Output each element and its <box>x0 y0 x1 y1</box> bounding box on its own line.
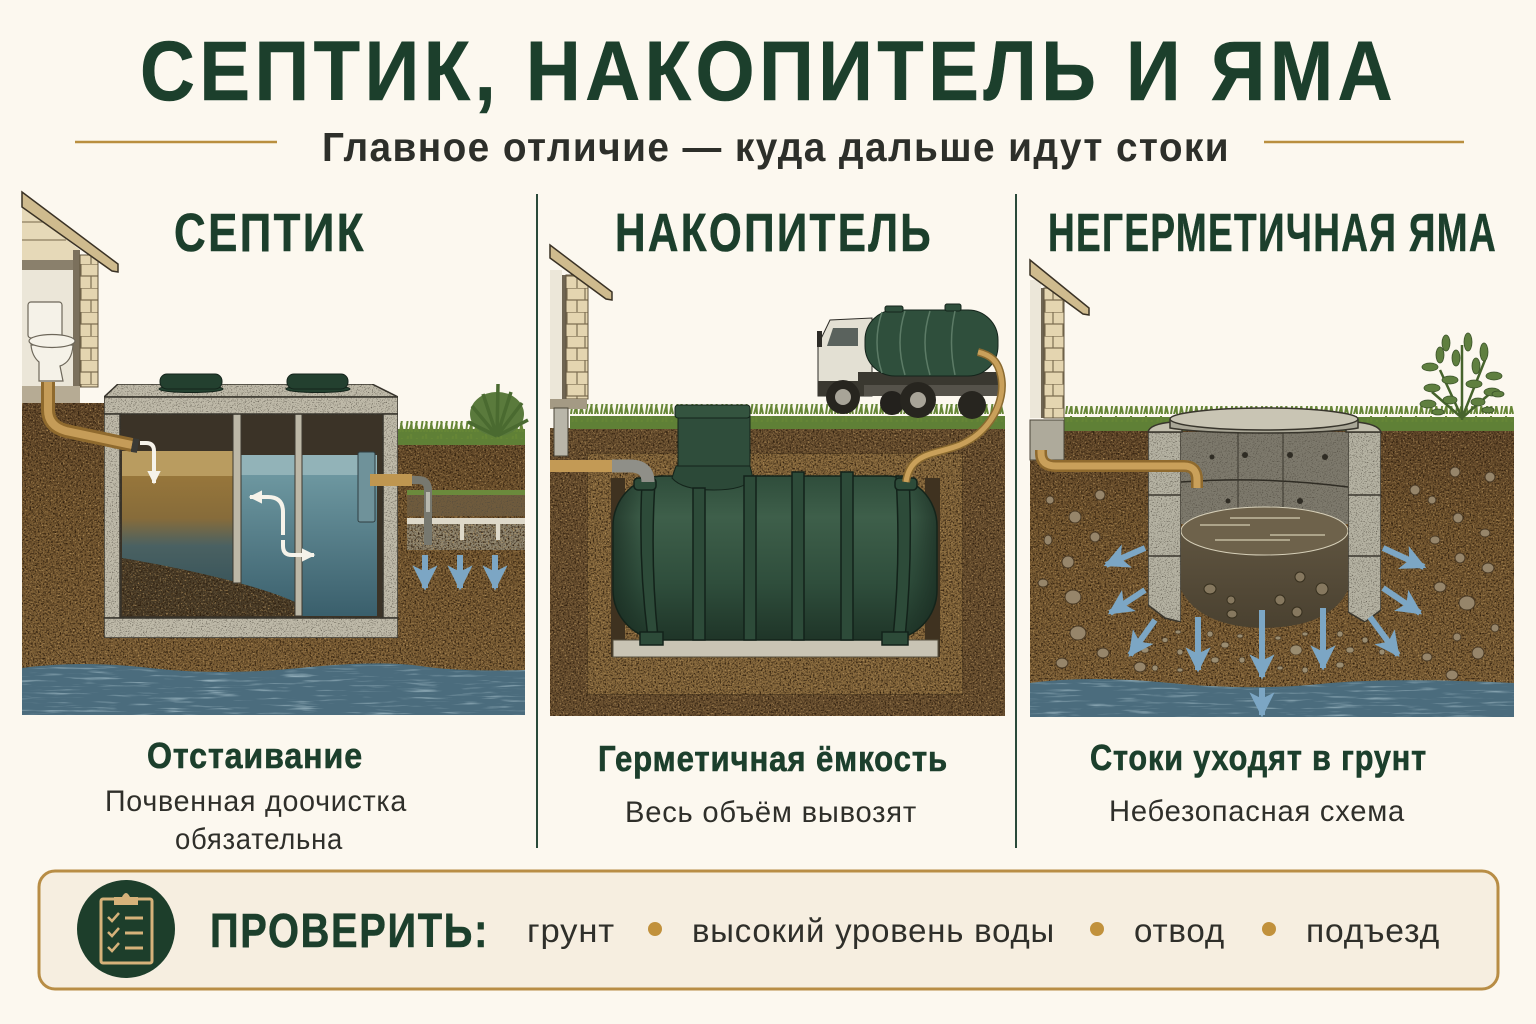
title: СЕПТИК, НАКОПИТЕЛЬ И ЯМА <box>140 24 1397 118</box>
soil <box>22 403 525 700</box>
icon: manholes <box>159 374 350 392</box>
item: access: подъезд <box>1306 912 1440 949</box>
slab <box>613 640 938 657</box>
inlet pipe <box>1041 450 1197 488</box>
pit shadow <box>611 478 940 657</box>
inlet pipe <box>550 460 648 482</box>
icon: bush <box>1420 333 1504 420</box>
pit interior <box>1181 432 1348 524</box>
septic tank <box>104 384 398 638</box>
neck <box>675 405 750 474</box>
caption title: Стоки уходят в грунт <box>1090 737 1427 778</box>
caption title: Отстаивание <box>147 735 363 776</box>
arrow: transfer flow <box>250 497 314 555</box>
concrete rings <box>1148 432 1381 622</box>
icon: toilet <box>28 302 75 381</box>
gravel under pit <box>1141 626 1385 673</box>
stones <box>1038 467 1499 680</box>
dot <box>648 922 662 936</box>
icon: clipboard <box>77 880 175 978</box>
caption text: Небезопасная схема <box>1109 795 1405 828</box>
tank <box>613 466 937 645</box>
vacuum truck <box>817 304 1001 419</box>
inlet pipe <box>48 382 138 446</box>
bar background <box>39 871 1498 989</box>
arrows: infiltration <box>425 555 495 588</box>
caption: септик <box>105 735 407 856</box>
item: water level: высокий уровень воды <box>692 912 1055 949</box>
house <box>22 192 118 403</box>
subtitle: Главное отличие — куда дальше идут стоки <box>322 124 1230 170</box>
drain field <box>407 490 525 550</box>
dot <box>1090 922 1104 936</box>
arrow: inlet flow <box>140 443 154 483</box>
caption title: Герметичная ёмкость <box>598 738 948 779</box>
hose <box>906 352 1002 482</box>
soil <box>550 428 1005 716</box>
house <box>550 245 612 456</box>
caption: яма <box>1090 737 1427 828</box>
groundwater <box>22 663 525 715</box>
caption: накопитель <box>598 738 948 829</box>
slab lid <box>1148 408 1381 433</box>
outlet pipe <box>370 480 428 545</box>
panel: septic illustration <box>22 192 528 715</box>
backfill <box>587 453 963 695</box>
sewage <box>1181 507 1348 628</box>
panel: holding tank illustration <box>550 245 1005 716</box>
panel: check list bar <box>39 871 1498 989</box>
heading: накопитель: НАКОПИТЕЛЬ <box>615 203 933 263</box>
dot <box>1262 922 1276 936</box>
caption text: Весь объём вывозят <box>625 796 917 829</box>
heading: септик: СЕПТИК <box>174 203 366 263</box>
caption line 1: Почвенная доочистка <box>105 785 407 818</box>
arrows: leakage <box>1106 548 1424 715</box>
groundwater <box>1030 679 1514 717</box>
item: soil: грунт <box>527 912 615 949</box>
item: drainage: отвод <box>1134 912 1225 949</box>
grass <box>570 404 1005 429</box>
label: ПРОВЕРИТЬ: <box>210 905 489 958</box>
house <box>1030 260 1089 460</box>
grass <box>1064 406 1514 431</box>
panel: leaking pit illustration <box>1030 260 1514 717</box>
caption line 2: обязательна <box>175 823 343 856</box>
grass <box>396 421 525 445</box>
soil <box>1030 430 1514 690</box>
icon: shrub <box>468 384 528 436</box>
